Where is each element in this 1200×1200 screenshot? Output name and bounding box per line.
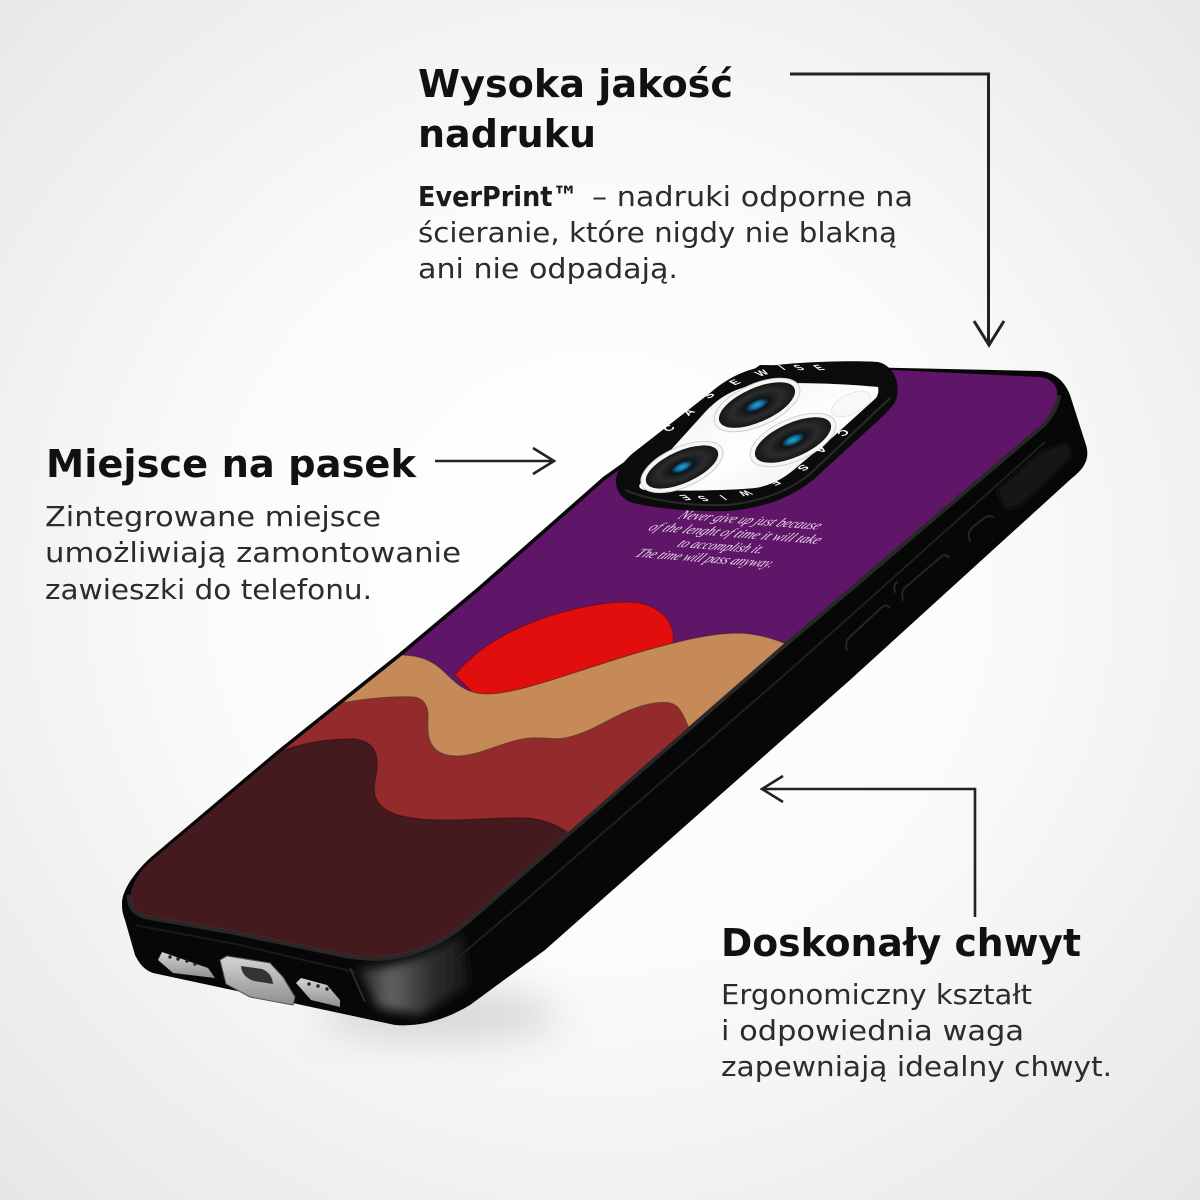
brand text lower	[676, 427, 851, 502]
island frame	[616, 361, 898, 511]
brand text upper: S	[701, 391, 718, 400]
arrow: strap attachment	[435, 448, 554, 474]
lens top	[706, 367, 808, 443]
arrow: print quality	[790, 74, 1004, 345]
bottom groove	[135, 925, 355, 972]
flash	[828, 386, 874, 422]
callout: print quality	[418, 62, 913, 285]
heading: print quality: Wysoka jakość	[418, 62, 733, 106]
tan dune	[130, 632, 785, 957]
right speaker holes	[307, 982, 329, 991]
lens right	[742, 402, 844, 478]
brand text upper	[661, 364, 828, 434]
quote text	[631, 508, 828, 571]
brand text lower: I	[716, 493, 729, 501]
body: grip: zapewniają idealny chwyt.	[721, 1050, 1112, 1083]
phone case	[100, 340, 1100, 1025]
island bevel	[625, 398, 890, 505]
body: grip: i odpowiednia waga	[721, 1014, 1024, 1047]
brand text lower: E	[676, 493, 693, 501]
body: print quality: EverPrint™	[418, 180, 578, 213]
brand text upper: S	[791, 364, 808, 372]
brand text lower: W	[734, 488, 755, 497]
brand text upper: A	[681, 407, 699, 418]
body: strap attachment: umożliwiają zamontowanie	[45, 536, 461, 569]
quote text: to accomplish it.	[673, 537, 770, 557]
glossy lower corner	[358, 932, 470, 1015]
callout: grip	[721, 921, 1112, 1083]
brand text upper: E	[727, 378, 744, 387]
brand text lower: S	[694, 494, 711, 502]
camera island	[616, 361, 898, 511]
body: print quality: ścieranie, które nigdy nie blakną	[418, 216, 897, 249]
body: print quality	[418, 180, 913, 285]
callout: strap attachment	[45, 442, 461, 606]
body: print quality: – nadruki odporne na	[592, 180, 913, 213]
volume and side buttons	[846, 516, 993, 650]
phone shadow	[320, 991, 560, 1039]
left speaker holes	[168, 955, 197, 966]
brand text upper: C	[661, 423, 679, 434]
brand text upper: W	[752, 368, 773, 378]
brick dune	[130, 696, 689, 957]
body: strap attachment: Zintegrowane miejsce	[45, 500, 381, 533]
body: print quality: ani nie odpadają.	[418, 252, 678, 285]
case body	[122, 365, 1087, 1025]
right speaker	[296, 978, 340, 1007]
rim highlight	[131, 395, 1057, 957]
red sun	[454, 602, 674, 694]
brand text lower: C	[833, 427, 851, 438]
printed back panel	[130, 370, 1058, 957]
quote text: Never give up just because	[673, 508, 828, 533]
brand text upper: I	[776, 364, 789, 372]
lens left	[634, 431, 730, 503]
bottom ports	[158, 952, 340, 1007]
quote text: The time will pass anyway.	[631, 546, 780, 571]
charging port opening	[241, 966, 273, 984]
body: grip	[721, 978, 1112, 1083]
camera glass	[639, 383, 878, 491]
body: strap attachment: zawieszki do telefonu.	[45, 573, 372, 606]
heading: strap attachment: Miejsce na pasek	[46, 442, 417, 486]
case side details	[131, 395, 1072, 1015]
body: grip: Ergonomiczny kształt	[721, 978, 1032, 1011]
side groove	[455, 442, 1045, 960]
left speaker	[158, 952, 215, 978]
purple sky	[131, 370, 1058, 893]
brand text lower: S	[794, 463, 811, 472]
charging port	[220, 956, 295, 1005]
heading: print quality	[418, 62, 733, 156]
heading: print quality: nadruku	[418, 112, 596, 156]
quote text: of the lenght of time it will take	[644, 520, 828, 547]
arrow: grip	[762, 776, 975, 917]
body: strap attachment	[45, 500, 461, 606]
brand text upper: E	[811, 364, 828, 372]
brand text lower: E	[766, 478, 783, 487]
brand text lower: A	[811, 444, 829, 455]
maroon dune	[130, 738, 568, 957]
heading: grip: Doskonały chwyt	[721, 921, 1081, 965]
upper corner highlight	[1000, 445, 1069, 507]
corner crease	[350, 968, 365, 1002]
